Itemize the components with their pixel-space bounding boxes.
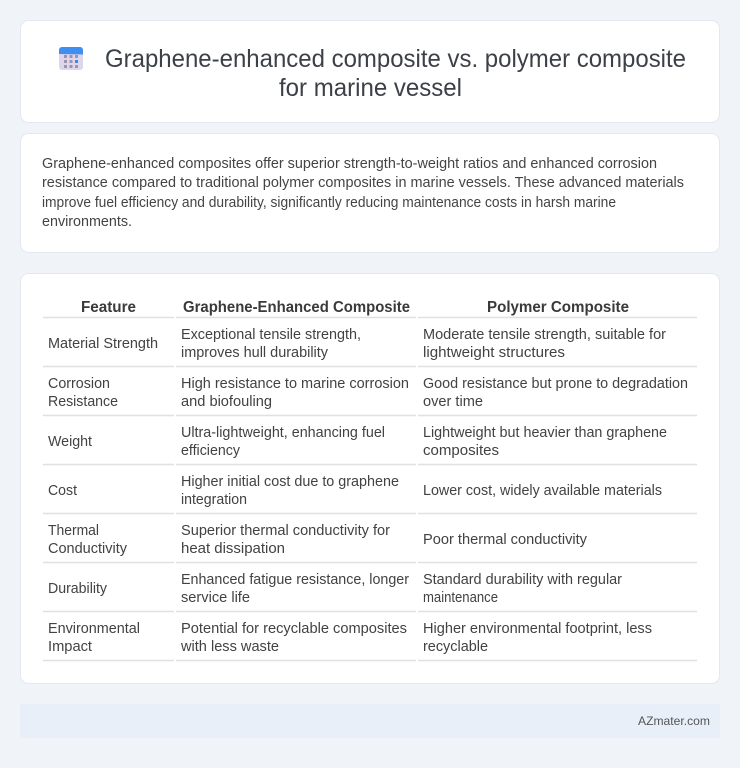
row: material strength: Material Strength: [48, 336, 158, 352]
footer bar: [20, 704, 720, 738]
table header: Graphene-Enhanced Composite: [183, 299, 410, 316]
row: material strength: improves hull durability: [181, 345, 329, 361]
panel: summary text: [20, 134, 720, 252]
table header: [43, 299, 697, 318]
text block: summary: resistance compared to traditional polymer composites in marine vessels. These advanced materials: [42, 175, 684, 191]
row: environmental impact: Potential for recyclable composites: [181, 621, 407, 637]
row: corrosion resistance: and biofouling: [181, 394, 272, 410]
row: thermal conductivity: Conductivity: [48, 541, 128, 557]
row: environmental impact: with less waste: [180, 639, 279, 655]
row: cost: integration: [181, 492, 247, 508]
text block: summary: improve fuel efficiency and durability, significantly reducing maintenance costs in harsh marine: [42, 195, 616, 211]
footer bar: AZmater.com: [638, 714, 710, 728]
row: corrosion resistance: Resistance: [48, 394, 118, 410]
row: environmental impact: recyclable: [423, 639, 488, 655]
row: corrosion resistance: over time: [423, 394, 483, 410]
title: Graphene-enhanced composite vs. polymer composite: [105, 45, 686, 73]
row: durability: [43, 572, 697, 612]
row: weight: Weight: [48, 434, 92, 450]
text block: summary: Graphene-enhanced composites offer superior strength-to-weight ratios and enhanced corrosion: [42, 156, 657, 172]
row: cost: [43, 474, 697, 514]
row: durability: Standard durability with regular: [423, 572, 622, 588]
title: for marine vessel: [279, 74, 462, 102]
row: material strength: Moderate tensile strength, suitable for: [423, 327, 666, 343]
row: environmental impact: Higher environmental footprint, less: [423, 621, 652, 637]
row: environmental impact: Environmental: [48, 621, 140, 637]
row: environmental impact: [43, 621, 697, 660]
row: material strength: Exceptional tensile strength,: [181, 327, 361, 343]
row: thermal conductivity: heat dissipation: [181, 541, 285, 557]
row: thermal conductivity: Superior thermal conductivity for: [181, 523, 390, 539]
table header: Polymer Composite: [487, 299, 629, 316]
row: environmental impact: Impact: [48, 639, 92, 655]
row: cost: Cost: [48, 483, 77, 499]
row: cost: Higher initial cost due to graphene: [181, 474, 399, 490]
row: thermal conductivity: Thermal: [48, 523, 99, 539]
row: corrosion resistance: Good resistance but prone to degradation: [423, 376, 688, 392]
row: weight: Ultra-lightweight, enhancing fuel: [181, 425, 385, 441]
row: corrosion resistance: High resistance to marine corrosion: [181, 376, 409, 392]
row: material strength: lightweight structures: [423, 345, 565, 361]
row: thermal conductivity: [43, 523, 697, 562]
table header: Feature: [81, 299, 136, 316]
text block: summary: [42, 156, 684, 230]
row: cost: Lower cost, widely available materials: [423, 483, 662, 499]
text block: summary: environments.: [42, 214, 132, 230]
row: thermal conductivity: Poor thermal conductivity: [423, 532, 588, 548]
panel: title card: [20, 20, 720, 122]
row: corrosion resistance: Corrosion: [48, 376, 110, 392]
row: durability: maintenance: [423, 590, 498, 606]
icon: calendar grid: [59, 47, 83, 70]
row: durability: Durability: [48, 581, 108, 597]
row: weight: [43, 425, 697, 464]
row: durability: Enhanced fatigue resistance, longer: [181, 572, 409, 588]
row: weight: efficiency: [181, 443, 241, 459]
row: durability: service life: [181, 590, 250, 606]
row: corrosion resistance: [43, 376, 697, 416]
row: weight: Lightweight but heavier than graphene: [423, 425, 667, 441]
title: [105, 45, 686, 102]
row: material strength: [43, 327, 697, 366]
row: weight: composites: [423, 443, 499, 459]
panel: comparison table: [20, 274, 720, 684]
